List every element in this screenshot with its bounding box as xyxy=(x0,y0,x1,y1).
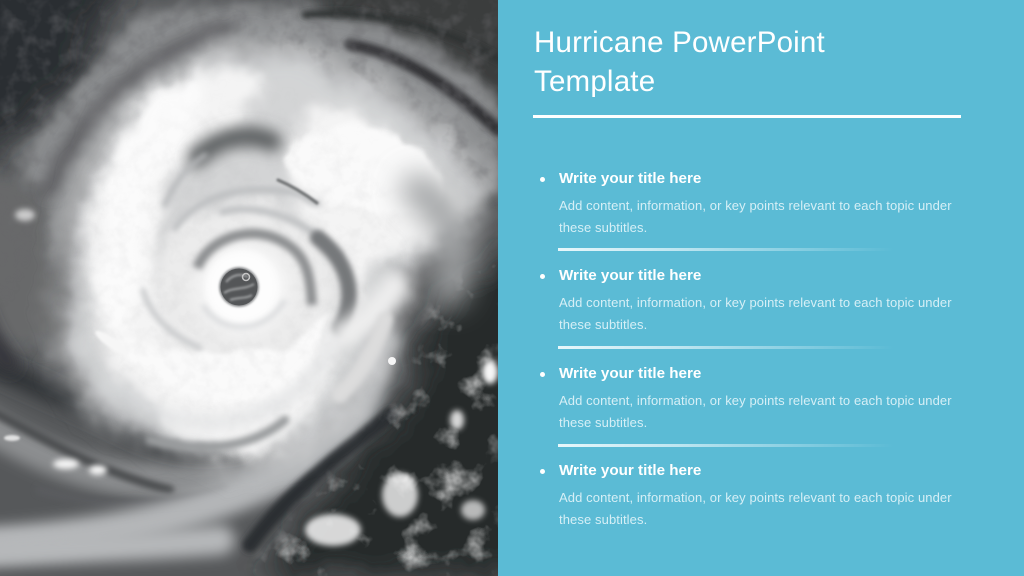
lower-left spiral bands xyxy=(0,13,500,552)
cloud texture xyxy=(0,0,498,576)
list item 3: these subtitles. xyxy=(559,415,647,430)
list item 3: Add content, information, or key points relevant to each topic under xyxy=(559,393,952,408)
inner spiral bands xyxy=(105,136,456,447)
panel: right content background xyxy=(498,0,1024,576)
list item 2: Write your title here xyxy=(559,267,701,284)
list item 1 xyxy=(540,170,952,235)
satellite image of hurricane xyxy=(0,0,498,576)
list item 3 xyxy=(540,365,952,430)
list item 1: these subtitles. xyxy=(559,220,647,235)
title: Hurricane PowerPoint xyxy=(534,26,825,59)
list item 4: Write your title here xyxy=(559,462,701,479)
main white cloud mass xyxy=(62,44,484,461)
list item 4: Add content, information, or key points relevant to each topic under xyxy=(559,490,952,505)
storm base fill xyxy=(0,0,498,576)
list item 2: Add content, information, or key points relevant to each topic under xyxy=(559,295,952,310)
divider 2 xyxy=(558,346,893,349)
eye xyxy=(219,267,259,307)
list item 1: Write your title here xyxy=(559,170,701,187)
list item 4: these subtitles. xyxy=(559,512,647,527)
storm base tones xyxy=(0,0,530,576)
title xyxy=(534,26,825,98)
list item 1: Add content, information, or key points relevant to each topic under xyxy=(559,198,952,213)
list item 3: Write your title here xyxy=(559,365,701,382)
title: Template xyxy=(534,65,655,98)
divider 3 xyxy=(558,444,893,447)
list item 2 xyxy=(540,267,952,332)
list item 4 xyxy=(540,462,952,527)
scattered bright clouds xyxy=(4,209,498,546)
list item 2: these subtitles. xyxy=(559,317,647,332)
eye wall and eye xyxy=(183,228,312,348)
title underline xyxy=(533,115,961,118)
divider 1 xyxy=(558,248,893,251)
